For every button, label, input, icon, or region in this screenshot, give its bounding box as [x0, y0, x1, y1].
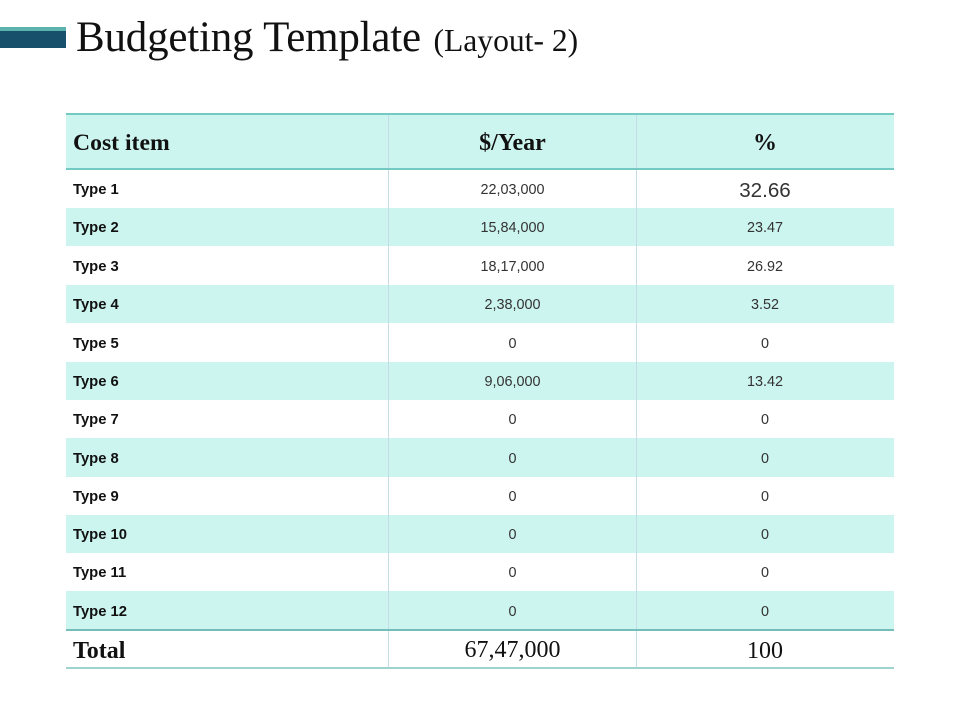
title: Budgeting Template (Layout- 2)	[76, 14, 578, 61]
header accent bar	[0, 27, 66, 48]
row: Type 2: 15,84,000	[480, 220, 545, 236]
row: Type 10: 0	[508, 527, 516, 543]
row: Type 8: 0	[508, 451, 516, 467]
row: Type 4: Type 4	[73, 297, 119, 313]
column headings: %	[753, 130, 777, 156]
row: Type 5: 0	[508, 336, 516, 352]
column headings: Cost item	[73, 130, 170, 156]
row: Type 9: 0	[508, 489, 516, 505]
row: Type 10: 0	[761, 527, 769, 543]
row: Type 6: 13.42	[747, 374, 783, 390]
row: Type 12: 0	[508, 604, 516, 620]
row: Type 5: Type 5	[73, 336, 119, 352]
row: Type 1: Type 1	[73, 182, 119, 198]
row: Type 7: 0	[508, 412, 516, 428]
row: Type 3: 26.92	[747, 259, 783, 275]
row: Total: Total	[73, 638, 125, 664]
row: Total: 67,47,000	[464, 637, 560, 663]
row: Type 9: Type 9	[73, 489, 119, 505]
row: Type 4: 3.52	[751, 297, 779, 313]
row: Total: 100	[747, 638, 783, 664]
row: Type 3: 18,17,000	[480, 259, 545, 275]
row: Type 1: 32.66	[739, 179, 791, 202]
row: Type 9: 0	[761, 489, 769, 505]
row: Type 6: Type 6	[73, 374, 119, 390]
column headings: $/Year	[479, 130, 546, 156]
row: Type 11: 0	[508, 565, 516, 581]
row: Type 4: 2,38,000	[484, 297, 541, 313]
header row background	[66, 114, 894, 169]
row: Type 11: 0	[761, 565, 769, 581]
row: Type 5: 0	[761, 336, 769, 352]
row: Type 3: Type 3	[73, 259, 119, 275]
row: Type 12: 0	[761, 604, 769, 620]
row: Type 2: Type 2	[73, 220, 119, 236]
row: Type 7: Type 7	[73, 412, 119, 428]
row: Type 8: 0	[761, 451, 769, 467]
row: Type 10: Type 10	[73, 527, 127, 543]
row: Type 8: Type 8	[73, 451, 119, 467]
row: Type 6: 9,06,000	[484, 374, 541, 390]
row: Type 7: 0	[761, 412, 769, 428]
row: Type 11: Type 11	[73, 565, 126, 581]
row: Type 1: 22,03,000	[480, 182, 545, 198]
row: Type 2: 23.47	[747, 220, 783, 236]
row: Type 12: Type 12	[73, 604, 127, 620]
